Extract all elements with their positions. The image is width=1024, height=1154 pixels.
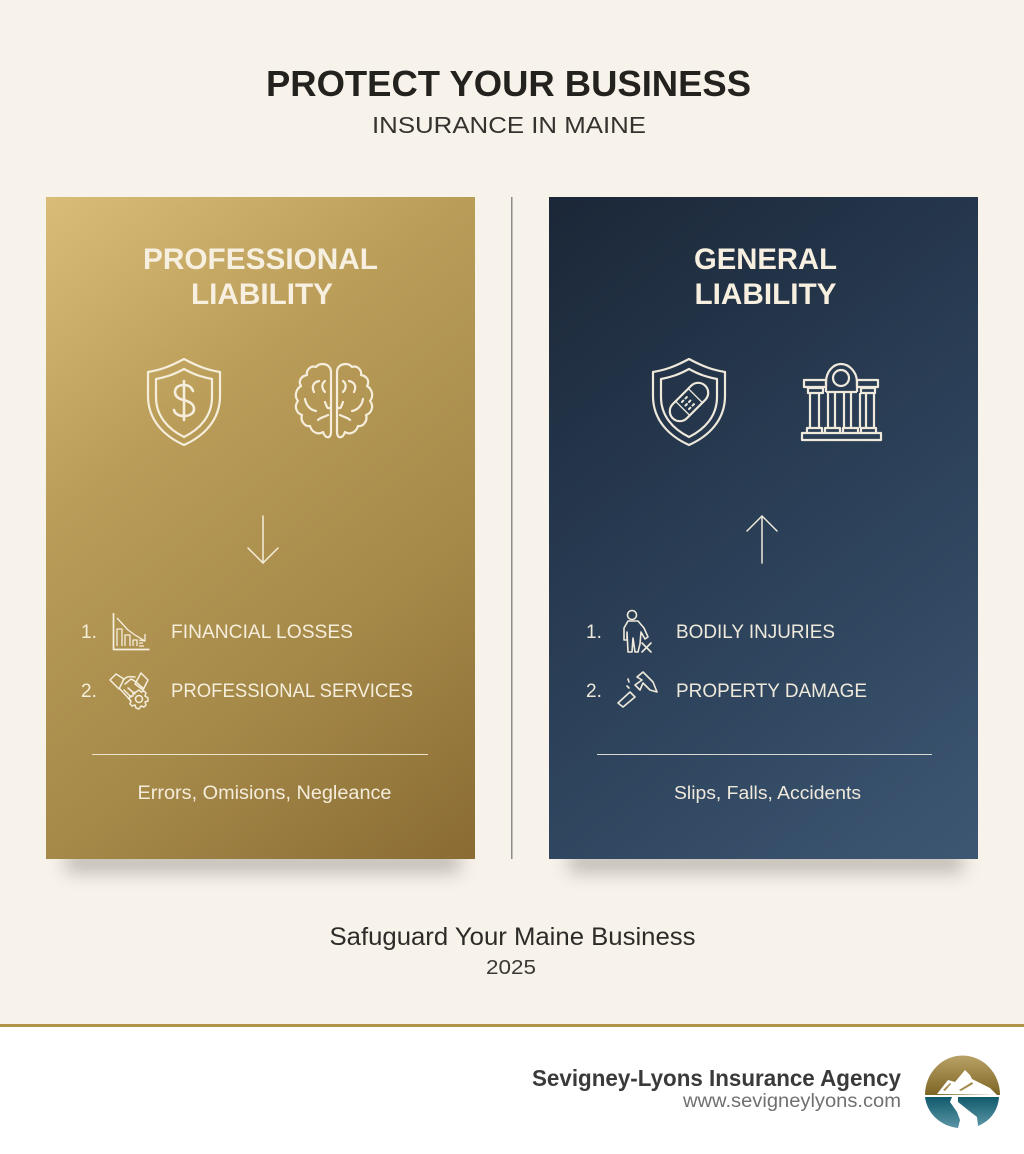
icon: shield with dollar — [148, 359, 220, 445]
brand bar — [0, 1024, 1024, 1154]
panel: general liability — [549, 197, 978, 872]
panel shadow — [66, 852, 460, 872]
bar background — [0, 1027, 1024, 1154]
agency name: Sevigney-Lyons Insurance Agency — [532, 1065, 901, 1091]
icon: handshake with gear — [110, 673, 148, 709]
footer tagline: Safuguard Your Maine Business — [330, 923, 696, 951]
icon: brain — [296, 364, 372, 437]
number: 2. — [81, 681, 97, 702]
icon: logo — [925, 1056, 1000, 1128]
title: PROTECT YOUR BUSINESS — [266, 63, 751, 104]
agency url: www.sevigneylyons.com — [682, 1090, 901, 1112]
panel background — [46, 197, 475, 859]
panel shadow — [569, 852, 963, 872]
rule — [92, 754, 428, 755]
icon: hammer breaking object — [618, 672, 657, 707]
number: 1. — [586, 622, 602, 643]
center divider — [511, 197, 512, 859]
icon: falling chart — [114, 613, 150, 650]
icon: injured person — [624, 610, 651, 652]
arrow: up — [747, 516, 777, 563]
subtitle: INSURANCE IN MAINE — [372, 112, 646, 138]
panel heading: LIABILITY — [694, 278, 836, 311]
label: BODILY INJURIES — [676, 622, 835, 643]
icon: shield with bandage — [653, 359, 725, 445]
panel heading — [143, 243, 378, 311]
caption: Slips, Falls, Accidents — [674, 782, 861, 803]
panel background — [549, 197, 978, 859]
label: PROFESSIONAL SERVICES — [171, 681, 413, 702]
label: FINANCIAL LOSSES — [171, 622, 353, 643]
caption: Errors, Omisions, Negleance — [138, 783, 392, 804]
item: financial losses — [81, 613, 353, 650]
number: 2. — [586, 681, 602, 702]
item: property damage — [586, 672, 867, 707]
item: bodily injuries — [586, 610, 835, 652]
panel: professional liability — [46, 197, 475, 872]
panel heading — [694, 243, 837, 311]
panel heading: GENERAL — [694, 243, 837, 276]
gold rule — [0, 1024, 1024, 1027]
icon: columned building — [802, 364, 881, 440]
rule — [597, 754, 932, 755]
arrow: down — [248, 516, 278, 563]
label: PROPERTY DAMAGE — [676, 681, 867, 702]
panel heading: PROFESSIONAL — [143, 243, 378, 276]
number: 1. — [81, 622, 97, 643]
footer year: 2025 — [486, 956, 536, 979]
item: professional services — [81, 673, 413, 709]
panel heading: LIABILITY — [191, 278, 333, 311]
